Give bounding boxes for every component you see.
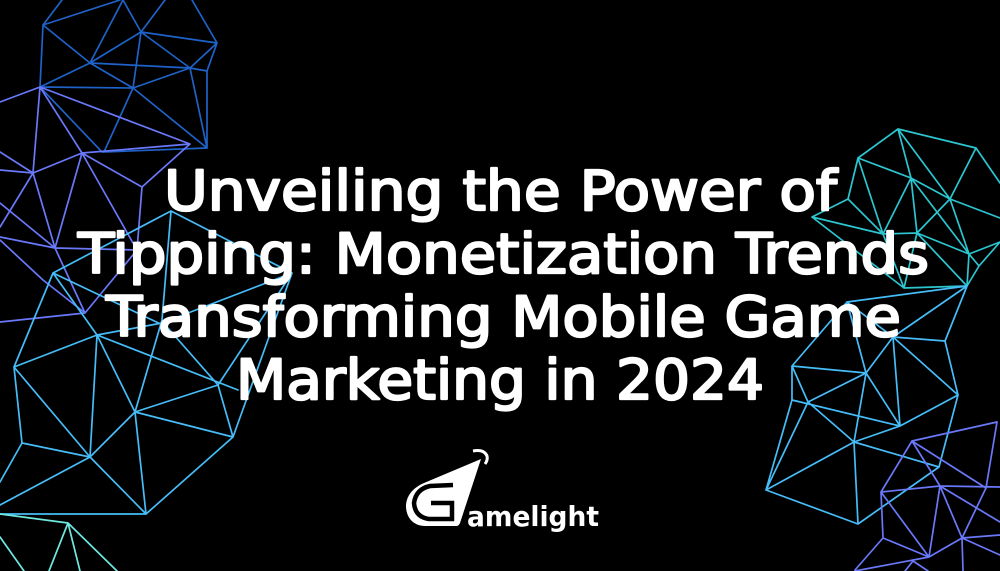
- title: Marketing in 2024: [236, 348, 764, 412]
- network mesh: bottom-right purple: [855, 422, 1000, 571]
- wordmark: amelight: [467, 500, 599, 533]
- network mesh: left sky blue: [0, 211, 292, 514]
- network mesh: right sky blue: [766, 286, 967, 524]
- network mesh: right teal: [812, 129, 1000, 288]
- network mesh: top-left dark blue: [40, 0, 217, 152]
- title: Unveiling the Power of: [164, 159, 839, 223]
- title: Tipping: Monetization Trends: [77, 222, 929, 286]
- logo: Gamelight: [406, 451, 599, 533]
- icon: spotlight G: [406, 451, 487, 526]
- title: [77, 159, 929, 412]
- network mesh: left purple: [0, 87, 190, 322]
- title: Transforming Mobile Game: [105, 285, 901, 349]
- network mesh: bottom-left aqua: [0, 514, 117, 571]
